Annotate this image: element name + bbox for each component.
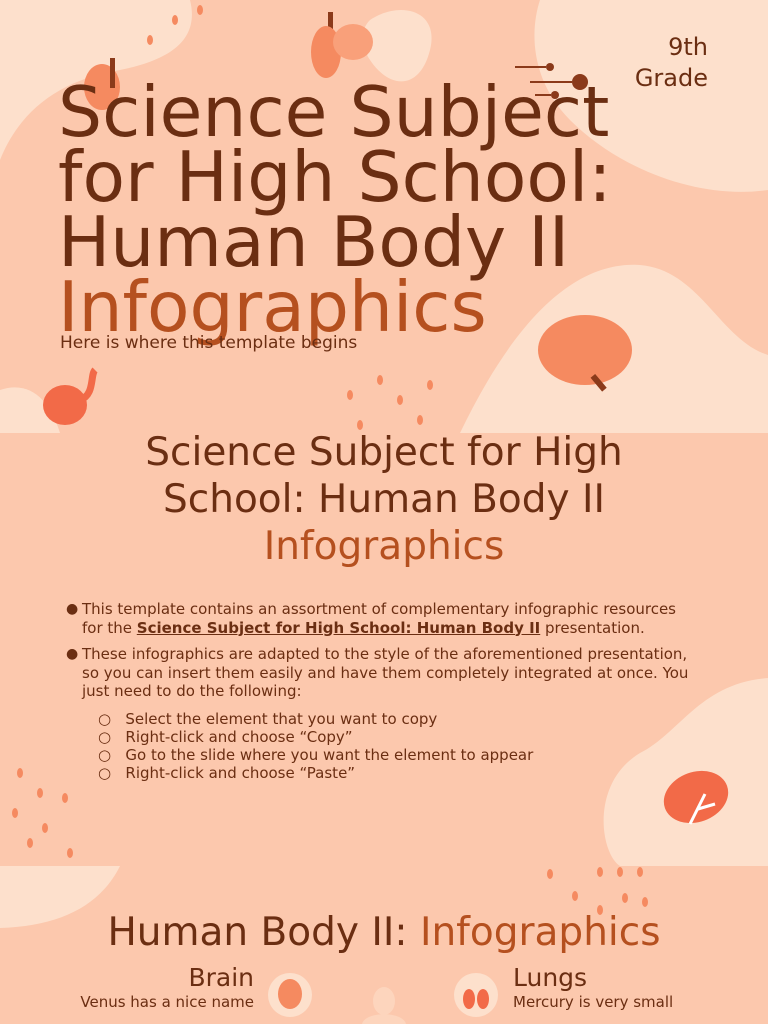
heading: section 2: Infographics [264,524,504,569]
grade label: 9th [668,33,708,61]
text block: bullets: ○ Go to the slide where you want the element to appear [98,746,533,764]
icon: liver [664,770,728,824]
subtitle: Here is where this template begins [60,333,357,353]
icon: sperm [515,63,588,99]
icon: brain [538,315,632,392]
item: lungs [513,963,673,1011]
item: brain: Brain [188,963,254,992]
item: brain: Venus has a nice name [80,993,254,1011]
text block: bullets: ○ Right-click and choose “Paste” [98,764,355,782]
heading: section 2: School: Human Body II [163,477,605,522]
title: Infographics [58,267,487,348]
panel: cover [0,0,768,433]
icon: lungs small [454,973,498,1017]
heading: section 3: Human Body II: Infographics [107,910,661,955]
icon: heart [84,58,120,110]
text block: bullets [66,600,688,782]
text block: bullets: ● [66,601,78,617]
item: brain [80,963,254,1011]
icon: stomach [43,368,98,425]
text block: bullets: ● [66,646,78,662]
text block: bullets: These infographics are adapted to the style of the aforementioned presentation, so you can insert them easily and have them completely integrated at once. You just need to do the following: [82,645,688,700]
title: for High School: [58,137,612,218]
icon: lungs [311,12,373,78]
text block: bullets: ○ Select the element that you want to copy [98,710,437,728]
panel: instructions [0,433,768,866]
title: Science Subject [58,72,609,153]
heading: section 2 [145,433,623,569]
panel: infographics [0,866,768,1024]
item: lungs: Lungs [513,963,587,992]
icon: brain small [268,973,312,1017]
text block: bullets: ○ Right-click and choose “Copy” [98,728,353,746]
grade label [635,33,708,92]
text block: bullets: This template contains an assortment of complementary infographic resources for the Science Subject for High School: Human Body II presentation. [82,600,676,636]
title [58,72,612,348]
item: lungs: Mercury is very small [513,993,673,1011]
grade label: Grade [635,64,708,92]
title: Human Body II [58,202,569,283]
